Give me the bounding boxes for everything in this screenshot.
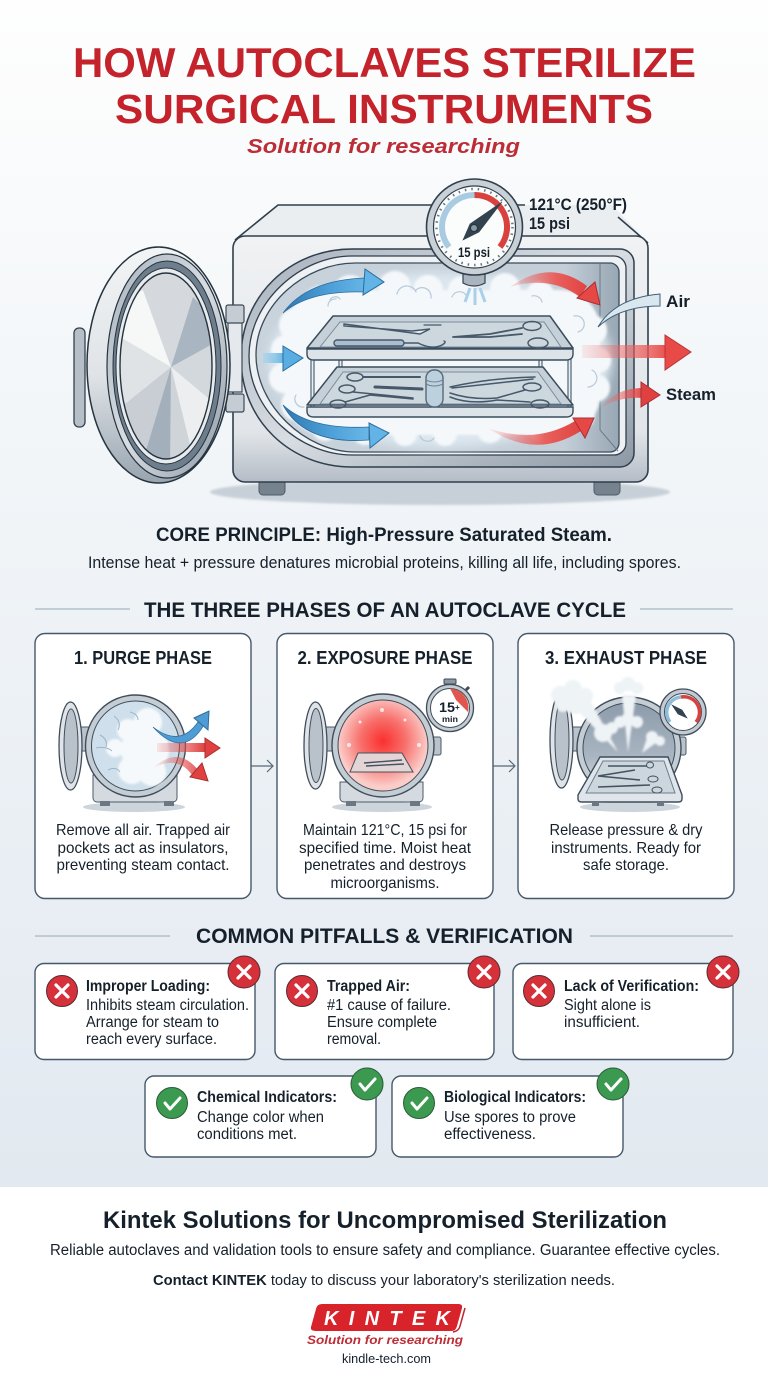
- panel: purge phase: [35, 634, 251, 898]
- text: exposure: Maintain 121°C, 15 psi for: [303, 822, 468, 839]
- text: [564, 978, 699, 1031]
- illustration: autoclave: [74, 179, 716, 505]
- text: exhaust: [550, 822, 702, 874]
- text: purge: Remove all air. Trapped air: [56, 822, 231, 839]
- machine feet: [259, 480, 620, 495]
- label: steam: Steam: [666, 385, 716, 404]
- text: purge: [56, 822, 231, 874]
- text: exhaust: Release pressure & dry: [550, 822, 702, 839]
- tray: [578, 757, 682, 802]
- gauge reading label: [529, 195, 627, 233]
- arrows: red steam out: [488, 272, 691, 445]
- door hinges: [226, 305, 244, 412]
- core principle: Intense heat + pressure denatures microbial proteins, killing all life, including spores.: [88, 554, 681, 572]
- icon: success: [404, 1088, 434, 1118]
- panel: improper loading: [35, 956, 260, 1060]
- text: exposure: microorganisms.: [330, 875, 440, 892]
- text: Change color when: [197, 1109, 324, 1126]
- chamber opening: [241, 249, 634, 467]
- door glass: [123, 274, 212, 458]
- arrows: blue steam in: [263, 269, 389, 448]
- panel: exhaust phase: 3. EXHAUST PHASE: [545, 648, 707, 668]
- sterilization pouch roll: [426, 370, 443, 407]
- panel: biological indicators: [392, 1068, 629, 1157]
- icon: falling gauge: [660, 689, 706, 735]
- icon: success badge: [597, 1068, 629, 1100]
- footer: [0, 1187, 768, 1376]
- icon: error badge: [468, 956, 500, 988]
- panel: trapped air: [275, 956, 500, 1060]
- text: Ensure complete: [327, 1014, 437, 1031]
- panel: purge phase: 1. PURGE PHASE: [74, 648, 212, 668]
- icon: heated chamber: [304, 694, 441, 812]
- panel: lack of verification: [513, 956, 739, 1060]
- icon: purge autoclave: [59, 695, 220, 812]
- text: effectiveness.: [444, 1126, 536, 1143]
- icon: error badge: [707, 956, 739, 988]
- text: Chemical Indicators:: [197, 1089, 337, 1106]
- text: Lack of Verification:: [564, 978, 699, 995]
- sterilization trays: [307, 316, 573, 417]
- core principle: CORE PRINCIPLE: High-Pressure Saturated Steam.: [156, 525, 612, 546]
- panel: chemical indicators: [145, 1068, 383, 1157]
- text: Biological Indicators:: [444, 1089, 586, 1106]
- logo: KINTEK: [324, 1308, 452, 1330]
- title: SURGICAL INSTRUMENTS: [115, 86, 653, 132]
- icon: success badge: [351, 1068, 383, 1100]
- heading: pitfalls: COMMON PITFALLS & VERIFICATION: [196, 925, 573, 948]
- logo: Solution for researching: [307, 1335, 463, 1347]
- floor shadow: [210, 479, 670, 505]
- steam puffs: [551, 677, 665, 753]
- text: Improper Loading:: [86, 978, 210, 995]
- title: HOW AUTOCLAVES STERILIZE: [73, 39, 696, 86]
- icon: error: [46, 976, 78, 1006]
- text: [86, 978, 249, 1048]
- text: reach every surface.: [86, 1031, 217, 1048]
- gauge stem and spray: [463, 272, 485, 305]
- text: Use spores to prove: [444, 1109, 576, 1126]
- text: exhaust: instruments. Ready for: [551, 840, 702, 857]
- text: purge: preventing steam contact.: [56, 857, 230, 874]
- icon: error: [524, 976, 554, 1006]
- text: Arrange for steam to: [86, 1014, 219, 1031]
- label: air: Air: [666, 292, 690, 311]
- panel: exposure phase: 2. EXPOSURE PHASE: [298, 648, 472, 668]
- logo: kindle-tech.com: [342, 1351, 431, 1366]
- text: purge: pockets act as insulators,: [58, 840, 228, 857]
- icon: timer: +: [455, 703, 460, 712]
- text: exposure: [299, 822, 472, 892]
- text: [197, 1089, 337, 1143]
- icon: error badge: [228, 956, 260, 988]
- cloud outline puffs: [295, 286, 597, 441]
- text: exposure: penetrates and destroys: [304, 857, 466, 874]
- pressure gauge: [426, 179, 522, 275]
- title: [73, 39, 696, 132]
- footer text: Reliable autoclaves and validation tools to ensure safety and compliance. Guarantee effective cycles.: [50, 1242, 720, 1259]
- text: Sight alone is: [564, 997, 651, 1014]
- panel: exhaust phase: [518, 634, 734, 898]
- subtitle: Solution for researching: [247, 136, 520, 158]
- arrow: exposure to exhaust: [493, 760, 515, 772]
- open door: [87, 247, 230, 483]
- icon: exhaust chamber: [550, 677, 686, 812]
- text: Inhibits steam circulation.: [86, 997, 249, 1014]
- tray posts: [311, 358, 571, 408]
- icon: error: [286, 976, 318, 1006]
- machine body: [233, 205, 648, 482]
- text: [444, 1089, 586, 1143]
- lower tray: [307, 367, 573, 417]
- panel: exposure phase: [277, 634, 493, 898]
- logo: [307, 1304, 465, 1366]
- icon: timer: 15: [439, 699, 455, 715]
- gauge reading label: 15 psi: [529, 214, 570, 233]
- icon: timer: [426, 679, 474, 732]
- text: exposure: specified time. Moist heat: [299, 840, 472, 857]
- arrow: air out: [598, 294, 660, 327]
- icon: success: [156, 1088, 188, 1118]
- text: conditions met.: [197, 1126, 297, 1143]
- text: removal.: [327, 1031, 381, 1048]
- text: Trapped Air:: [327, 978, 410, 995]
- footer heading: Kintek Solutions for Uncompromised Sterilization: [103, 1207, 667, 1234]
- text: [327, 978, 451, 1048]
- text: insufficient.: [564, 1014, 640, 1031]
- call to action: Contact KINTEK today to discuss your laboratory's sterilization needs.: [153, 1272, 615, 1289]
- heading: three phases: THE THREE PHASES OF AN AUTOCLAVE CYCLE: [144, 599, 626, 622]
- upper instruments: [334, 322, 548, 348]
- gauge reading label: 121°C (250°F): [529, 195, 627, 214]
- lower instruments: [330, 373, 549, 408]
- upper tray: [307, 316, 573, 360]
- door handle: [74, 328, 85, 427]
- core principle: [88, 525, 681, 572]
- pressure gauge: 15 psi: [458, 244, 490, 260]
- text: exhaust: safe storage.: [583, 857, 669, 874]
- text: #1 cause of failure.: [327, 997, 451, 1014]
- steam cloud: [268, 271, 612, 448]
- arrow: purge to exposure: [251, 760, 273, 772]
- icon: timer: min: [442, 715, 458, 724]
